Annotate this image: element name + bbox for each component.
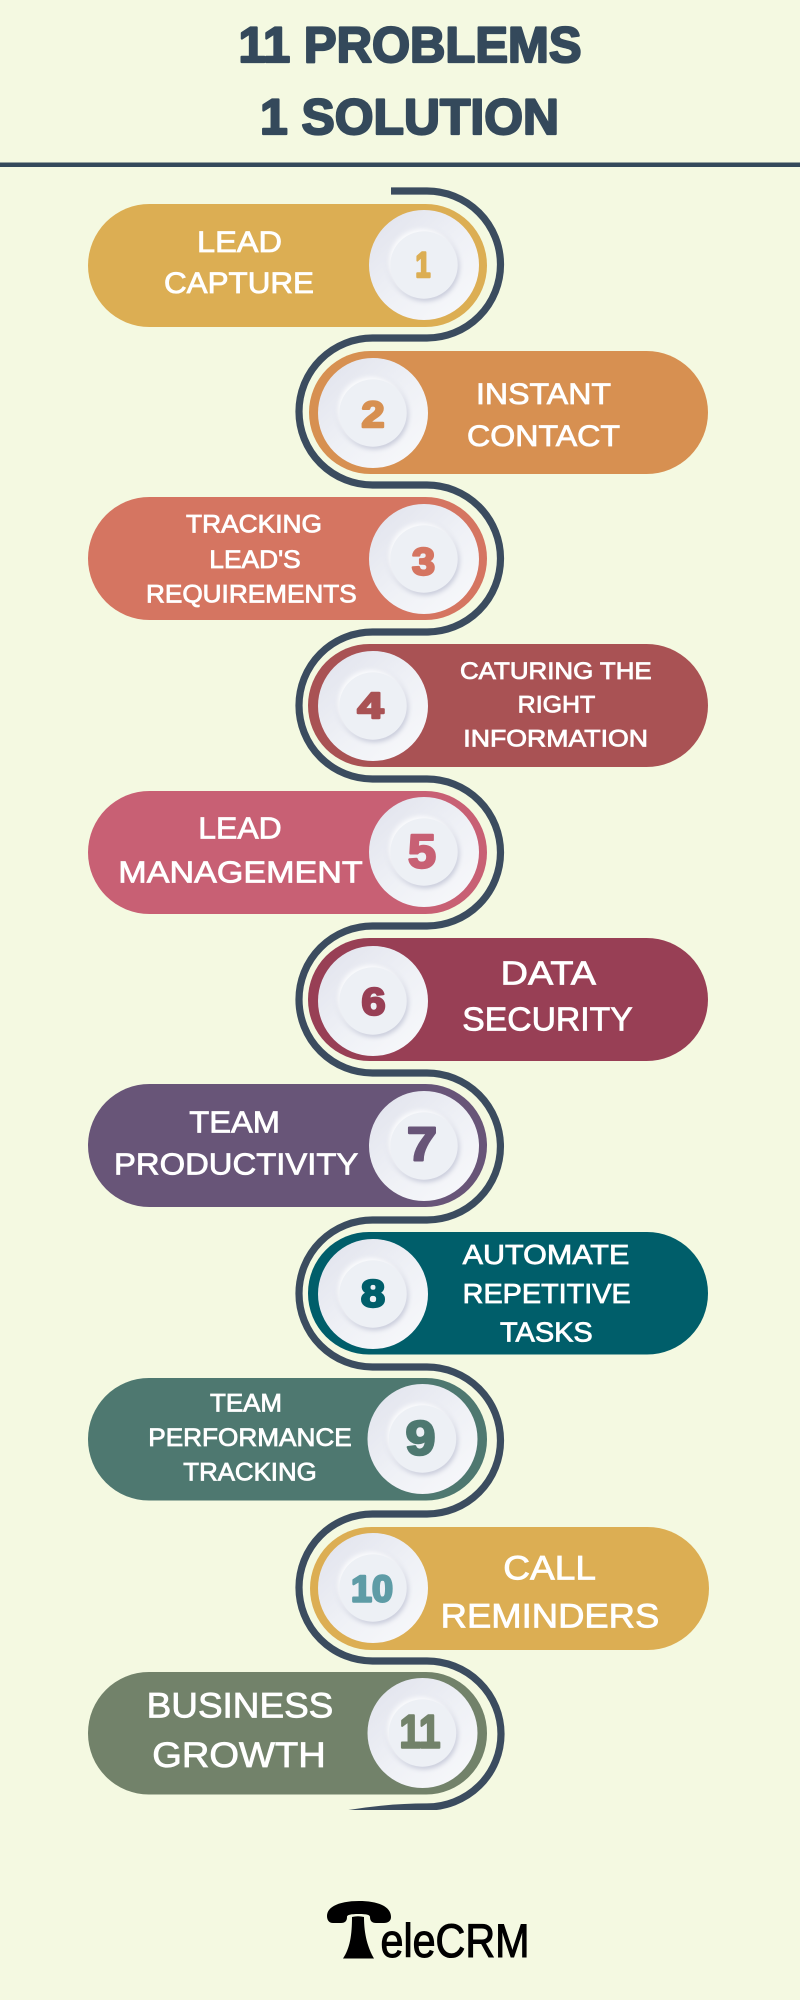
label: PRODUCTIVITY	[114, 1146, 358, 1181]
label: BUSINESS	[147, 1687, 333, 1726]
number badge 10: 10	[351, 1568, 393, 1610]
panel: 11 business growth	[88, 1672, 487, 1794]
label	[146, 511, 357, 609]
label: LEAD'S	[209, 546, 301, 574]
label	[441, 1549, 659, 1636]
number badge 5	[369, 797, 479, 907]
label: TEAM	[189, 1104, 280, 1139]
number badge 11: 11	[400, 1706, 440, 1758]
title: 1 SOLUTION	[260, 89, 559, 145]
number badge 7	[369, 1091, 479, 1201]
title	[238, 17, 582, 145]
number badge 7: 7	[407, 1118, 437, 1170]
header divider line	[0, 162, 800, 167]
icon: telephone forming the letter T	[327, 1901, 391, 1958]
label: CONTACT	[467, 420, 620, 453]
panel: 3 tracking lead's requirements	[88, 497, 487, 620]
label	[467, 378, 620, 453]
logo: TeleCRM	[327, 1901, 530, 1967]
label: RIGHT	[518, 692, 596, 719]
pill	[88, 1084, 487, 1207]
label: REMINDERS	[441, 1598, 659, 1636]
label: INFORMATION	[463, 726, 648, 753]
number badge 6: 6	[362, 982, 386, 1024]
number badge 5: 5	[408, 824, 436, 878]
panel: 8 automate repetitive tasks	[308, 1232, 708, 1354]
pill	[310, 1527, 709, 1650]
title: 11 PROBLEMS	[238, 17, 582, 73]
panel: 6 data security	[308, 938, 708, 1061]
number badge 2: 2	[362, 394, 384, 435]
panel: 5 lead management	[88, 791, 487, 914]
pill	[308, 644, 708, 767]
number badge 4	[318, 651, 428, 761]
pill	[88, 1378, 487, 1500]
number badge 3: 3	[412, 542, 435, 584]
number badge 6	[318, 946, 428, 1056]
pill	[88, 791, 487, 914]
number badge 4: 4	[358, 685, 384, 726]
number badge 1	[369, 210, 479, 320]
pill	[309, 351, 708, 474]
label: AUTOMATE	[463, 1239, 629, 1270]
panel: 9 team performance tracking	[88, 1378, 487, 1500]
label	[114, 1104, 358, 1181]
number badge 11	[368, 1678, 478, 1788]
number badge 9: 9	[406, 1412, 436, 1466]
label	[148, 1390, 352, 1487]
panel: 7 team productivity	[88, 1084, 487, 1207]
label: TRACKING	[186, 511, 322, 539]
number badge 2	[318, 358, 428, 468]
label	[147, 1687, 333, 1775]
panel: 10 call reminders	[310, 1527, 709, 1650]
number badge 8	[318, 1239, 428, 1349]
number badge 10	[318, 1533, 428, 1643]
label: GROWTH	[152, 1736, 326, 1775]
label	[463, 1239, 631, 1348]
label: DATA	[501, 955, 596, 992]
label: PERFORMANCE	[148, 1424, 352, 1452]
label: CATURING THE	[460, 658, 652, 685]
label: REQUIREMENTS	[146, 581, 357, 609]
pill	[88, 497, 487, 620]
label: REPETITIVE	[463, 1278, 631, 1309]
pill	[308, 1232, 708, 1354]
label	[164, 226, 314, 300]
label: LEAD	[197, 226, 282, 259]
panel: 2 instant contact	[309, 351, 708, 474]
label: SECURITY	[462, 1001, 633, 1038]
panel: 1 lead capture	[88, 204, 487, 327]
label: TASKS	[500, 1317, 593, 1348]
label: INSTANT	[476, 378, 611, 411]
number badge 3	[369, 504, 479, 614]
number badge 1: 1	[416, 246, 430, 285]
label: CAPTURE	[164, 267, 314, 300]
pill	[88, 1672, 487, 1794]
serpentine connector line	[299, 191, 501, 1817]
label	[118, 811, 363, 890]
pill	[308, 938, 708, 1061]
pill	[88, 204, 487, 327]
label	[460, 658, 652, 753]
number badge 8: 8	[361, 1274, 385, 1316]
label: CALL	[503, 1549, 596, 1587]
label	[462, 955, 633, 1038]
number badge 9	[368, 1384, 478, 1494]
label: MANAGEMENT	[118, 855, 363, 890]
panel: 4 capturing the right information	[308, 644, 708, 767]
label: TRACKING	[183, 1459, 317, 1487]
label: TEAM	[210, 1390, 282, 1418]
logo wordmark: eleCRM	[380, 1914, 530, 1967]
label: LEAD	[198, 811, 282, 846]
